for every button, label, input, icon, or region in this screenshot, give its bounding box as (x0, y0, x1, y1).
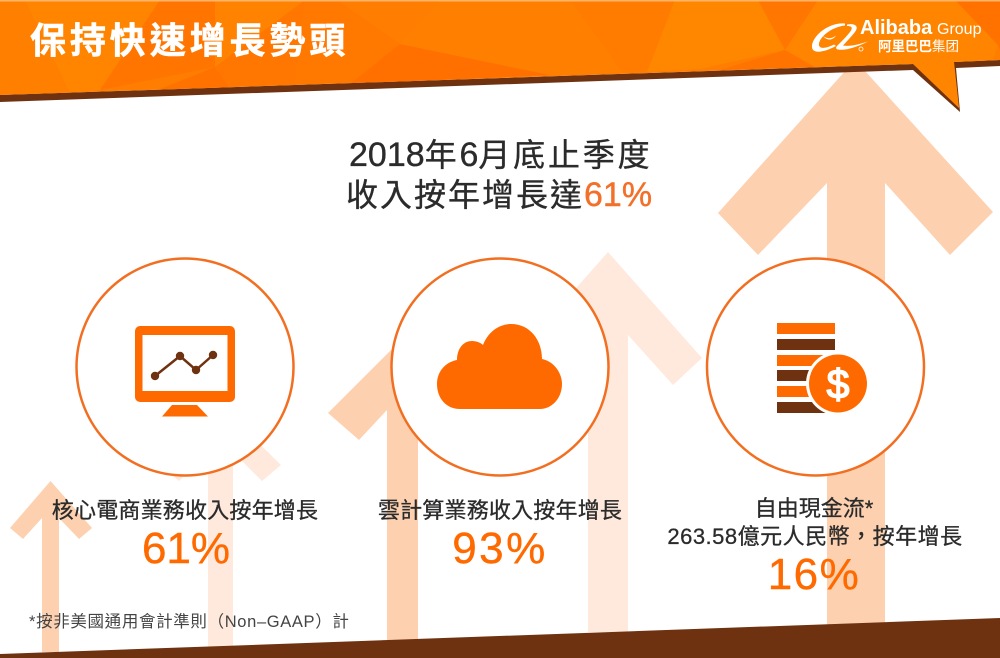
panel: cloud (378, 258, 622, 573)
label: 雲計算業務收入按年增長 (378, 498, 622, 523)
circle (76, 258, 294, 476)
title: 保持快速增長勢頭 (30, 20, 349, 61)
heading: 收入按年增長達61% (346, 176, 652, 214)
logo mark (812, 23, 868, 52)
panel: e-commerce (52, 258, 318, 573)
header banner (0, 0, 1000, 112)
value: 16% (768, 550, 860, 599)
label: 自由現金流* (755, 496, 874, 521)
label: 核心電商業務收入按年增長 (52, 498, 318, 523)
arrow: center-left background arrow (328, 339, 476, 645)
arrow: large right background arrow (718, 60, 993, 630)
icon: monitor with line chart (135, 326, 235, 416)
logo: Alibaba Group: Group (937, 21, 982, 38)
logo wordmark: Alibaba (860, 17, 933, 39)
header shadow stripe (0, 60, 1000, 112)
sublabel: 263.58億元人民幣，按年增長 (667, 524, 963, 549)
value: 93% (452, 524, 548, 573)
logo: Alibaba Group (812, 17, 982, 54)
header orange background (0, 0, 1000, 108)
heading (346, 136, 652, 214)
icon: cloud (437, 324, 562, 409)
arrow: middle pale background arrow (514, 252, 702, 632)
arrow: small far-left background arrow (10, 481, 92, 652)
arrow: pale left background arrow (160, 405, 281, 650)
heading: 2018年6月底止季度 (349, 136, 652, 174)
value: 61% (142, 524, 230, 573)
footer band (0, 618, 1000, 658)
logo chinese name: 阿里巴巴集团 (878, 39, 959, 54)
icon: coin stack with dollar (777, 323, 870, 416)
circle (707, 258, 924, 476)
footnote: *按非美國通用會計準則（Non–GAAP）計 (29, 612, 350, 631)
header low-poly facets (0, 0, 1000, 108)
panel: free cash flow (667, 258, 963, 599)
circle (392, 258, 608, 476)
icon: coin stack with dollar: $ (827, 361, 850, 407)
